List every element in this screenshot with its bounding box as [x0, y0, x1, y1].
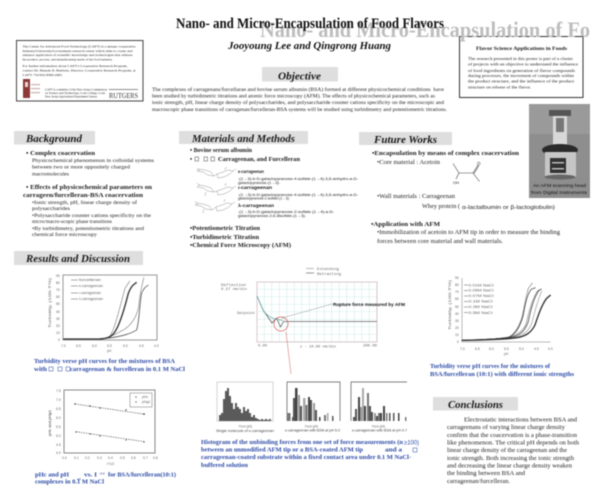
x axis labels: 6.0	[92, 344, 97, 348]
conclusions text: confirm that the coacervation is a phase-transition	[447, 432, 577, 439]
caption: ionic strength turbidity chart	[430, 363, 575, 378]
caption: carrageenan turbidity chart	[34, 358, 185, 373]
carrageenan formula labels	[238, 169, 359, 218]
carrageenan formula labels: galactopyranose-2-sulfate-(1→3)-	[238, 196, 291, 200]
conclusions text: like phenomenon. The critical pH depends on both	[447, 440, 579, 446]
background text: carrageen/furcelleran-BSA coacervation	[23, 192, 144, 199]
legend: λ-carrageenan	[79, 297, 103, 301]
x axis labels: 5.0	[519, 347, 524, 351]
encapsulation text: •Encapsulation by means of complex coacervation	[372, 151, 520, 157]
conclusions text: linear charge density of the carrageenan and the	[447, 447, 567, 454]
x axis labels: 0.8	[153, 456, 158, 460]
histogram subtitle: κ-carrageenan with BSA at pH 5.0	[285, 428, 340, 432]
legend: 0.07M NaCl	[468, 294, 494, 298]
x axis labels: 0.0	[62, 456, 67, 460]
background text: macromolecules	[32, 172, 69, 178]
panel: background	[14, 131, 154, 238]
caption: carrageenan turbidity chart: carrageenan & furcelleran in 0.1 M NaCl	[70, 366, 185, 373]
x axis labels: 6.5	[475, 347, 480, 351]
axis labels: 200.00	[363, 344, 377, 348]
x axis labels: 0.5	[120, 456, 125, 460]
icon: lambda-carrageenan structure	[195, 199, 235, 213]
Rutgers affiliation text: CAFT is a member of the New Jersey Commission	[45, 88, 107, 92]
y axis labels: 0	[457, 340, 459, 344]
x axis labels	[61, 344, 159, 353]
heading: future works: Future Works	[373, 134, 437, 146]
caption: ionic strength chart: complexes in 0.1 M NaCl	[35, 478, 104, 486]
objective paragraph: macroscopic phase transitions of carragenan/furcelleran-BSA systems will be studied using turbidimetry and potentiometric titrations.	[152, 106, 447, 113]
x axis labels	[460, 347, 553, 356]
legend	[71, 278, 103, 301]
axis labels: Force (pN)	[239, 424, 252, 428]
x axis labels: 7.0	[460, 347, 465, 351]
caption: carrageenan turbidity chart: with	[34, 366, 48, 373]
caption: carrageenan turbidity chart: Turbidity verse pH curves for the mixtures of BSA	[34, 358, 176, 365]
background text: • Complex coacervation	[26, 150, 96, 157]
line chart: turbidity vs pH at different ionic strengths	[448, 276, 553, 356]
background text: micro/macro-scopic phase transitions	[32, 219, 112, 225]
x axis labels: 4.5	[534, 347, 539, 351]
encapsulation text	[372, 151, 555, 211]
carrageenan formula labels: ι-carrageenan	[238, 185, 272, 191]
CAFT description text	[22, 44, 136, 77]
AFM image caption: from Digital Instruments	[531, 190, 588, 195]
histogram subtitle: κ-carrageenan with BSA at pH 4.7	[352, 428, 407, 432]
y axis labels: 5.5	[56, 425, 61, 429]
y axis labels: 90	[455, 276, 459, 280]
caption: ionic strength chart: for BSA/furcelleran(10:1)	[108, 472, 176, 478]
y axis labels: 10	[56, 331, 60, 335]
bar chart: histogram with BSA at pH 5.0	[285, 382, 340, 432]
caption: histograms	[201, 439, 419, 469]
chart legend	[306, 267, 341, 277]
panel: flavor science applications	[460, 36, 583, 98]
line chart: turbidity vs pH for carrageenans	[48, 274, 159, 353]
heading: future works	[359, 132, 452, 146]
caption: ionic strength turbidity chart: BSA/furcelleran (10:1) with different ionic strengths	[430, 371, 575, 378]
axis labels: Force (pN)	[305, 424, 318, 428]
flavor box text: of projects with an objective to understand the influence	[468, 62, 578, 66]
Rutgers affiliation text	[45, 88, 107, 98]
x axis labels: 0.6	[131, 456, 136, 460]
line chart: pHc and pHphi vs ionic strength	[48, 389, 158, 466]
flavor box text: structure on release of the flavor.	[468, 84, 531, 90]
caption: ionic strength chart: -1/2	[99, 472, 105, 476]
caption: histograms: buffered solution	[201, 462, 249, 469]
heading: conclusions	[433, 397, 518, 411]
x axis labels: 0.3	[97, 456, 102, 460]
flavor box text	[468, 56, 578, 90]
caption: ionic strength chart: vs. I	[84, 472, 98, 478]
panel: objective	[152, 67, 447, 113]
y axis labels: 50	[455, 305, 459, 309]
x axis labels: 6.5	[76, 344, 81, 348]
legend: 0.3M NaCl	[468, 305, 493, 309]
CAFT description text: Industry/University/Government research center which aims to create and	[22, 49, 133, 53]
AFM application text	[371, 222, 560, 245]
CAFT description text: For further information about CAFT's Cooperative Research Program,	[22, 64, 128, 69]
background text: between two or more oppositely charged	[32, 164, 130, 170]
legend: κ-carrageenan	[79, 284, 103, 288]
y axis labels: 80	[455, 283, 459, 287]
legend: pHφ1	[142, 400, 151, 404]
image: AFM scanning head	[529, 104, 590, 198]
background text: •Ionic strength, pH, linear charge density of	[32, 199, 137, 206]
heading: objective	[262, 67, 338, 82]
y axis labels: 80	[56, 281, 60, 285]
methods list: •Chemical Force Microscopy (AFM)	[190, 242, 291, 249]
conclusions text: the binding between BSA and	[447, 471, 525, 477]
icon: Rutgers logo: RUTGERS	[109, 92, 138, 100]
legend: furcelleran	[79, 278, 101, 282]
y axis labels: 7.5	[56, 389, 61, 393]
objective paragraph: ionic strength, pH, linear charge density of polysaccharides, and polysaccharide counter cations specificity on the microscopic and	[152, 99, 444, 106]
flavor box heading: Flavor Science Applications in Foods	[476, 47, 567, 52]
chart legend: Retracting	[317, 272, 341, 277]
x axis labels: 0.1	[74, 456, 79, 460]
background text: Physicochemical phenomenon in colloidal systems	[32, 158, 154, 164]
caption: histograms: carrageenan-coated substrate within a fixed contact area under 0.1 M NaCl-	[201, 454, 411, 461]
x axis labels: 6.0	[489, 347, 494, 351]
materials list	[190, 148, 301, 163]
encapsulation text: •Wall materials : Carrageenan	[377, 194, 455, 200]
icon: kappa-carrageenan structure	[197, 167, 236, 178]
caption: histograms: ≥100)	[404, 440, 419, 446]
conclusions text: and decreasing the linear charge density weaken	[447, 464, 572, 470]
AFM application text: •Application with AFM	[371, 222, 440, 228]
encapsulation text: •Core material : Acetoin	[377, 160, 440, 166]
panel: future works	[359, 132, 560, 245]
Rutgers affiliation text: New Jersey Agricultural Experiment Station	[45, 94, 97, 98]
y axis labels: Turbidity, (100-T%)	[48, 278, 52, 328]
encapsulation text: α-lactalbumin or β-lactoglobulin)	[462, 205, 555, 211]
carrageenan formula labels: galactopyranose-2,6-disulfate-(1→3)-	[238, 214, 307, 218]
CAFT description text: the product, process, and manufacturing needs of the food industry.	[22, 58, 113, 62]
x axis labels: 4.5	[139, 344, 144, 348]
methods list: •Potentiometric Titration	[190, 226, 261, 232]
icon: acetoin structure: O	[477, 161, 481, 166]
arrow to histograms	[286, 332, 291, 374]
conclusions text: Electrostatic interactions between BSA and	[464, 418, 577, 424]
y axis labels: 70	[455, 290, 459, 294]
y axis labels: 5.0	[56, 434, 61, 438]
panel: results and discussion heading	[14, 251, 143, 265]
axis labels: Setpoint	[237, 311, 255, 316]
plot grid	[257, 282, 377, 342]
y axis labels: 30	[455, 319, 459, 323]
x axis labels	[62, 456, 158, 466]
histogram bars	[288, 388, 334, 421]
conclusions text: ionic strength. Both increasing the ionic strength	[447, 456, 574, 462]
flavor box text: of food ingredients on generation of flavor compounds	[468, 68, 575, 73]
materials list: • Bovine serum albumin	[190, 148, 253, 154]
materials list: Carrageenan, and Furcelleran	[218, 157, 301, 163]
background text	[23, 150, 154, 238]
caption: histograms: between an unmodified AFM tip or a BSA-coated AFM tip	[201, 446, 364, 454]
x axis labels: 5.5	[504, 347, 509, 351]
encapsulation text: Whey protein (	[422, 203, 460, 210]
methods list	[190, 226, 291, 249]
materials list: •	[190, 157, 192, 163]
carrageenan formula labels: -(1→3)-b-D-galactopyranose-2-sulfate-(1→4)-a-D-	[238, 210, 335, 214]
title: Nano- and Micro-Encapsulation of Food Flavors	[176, 16, 444, 32]
CAFT description text: enhance application of scientific knowledge and technologies that address	[22, 53, 133, 57]
curves	[63, 277, 148, 339]
background text: •Polysaccharide counter cations specificity on the	[32, 212, 152, 219]
caption: ionic strength chart: pHc and pH	[35, 472, 69, 478]
y axis labels: 4.0	[56, 451, 61, 455]
curves	[462, 283, 551, 341]
axis labels	[221, 283, 377, 350]
y axis labels: 90	[56, 274, 60, 278]
panel: materials and methods	[179, 131, 359, 249]
y axis labels: 50	[56, 302, 60, 306]
y axis labels: Turbidity, (100-T%)	[448, 280, 452, 330]
carrageenan formula labels: λ-carrageenan	[238, 203, 274, 209]
panel: conclusions	[433, 397, 579, 485]
bar chart: histogram with BSA at pH 4.7	[351, 382, 407, 432]
legend	[464, 284, 494, 315]
caption: ionic strength turbidity chart: Turbidity verse pH curves for the mixtures of	[430, 363, 551, 370]
conclusions text: carrageenans of varying linear charge density	[447, 424, 565, 431]
x axis labels: 4.0	[154, 344, 159, 348]
y axis labels	[48, 389, 61, 455]
y axis labels: 60	[56, 295, 60, 299]
y axis labels: 4.5	[56, 443, 61, 447]
AFM image caption: An AFM scanning head	[533, 183, 586, 188]
force curves	[257, 296, 377, 327]
axis labels: 0.57 nm/div	[221, 287, 247, 292]
x axis labels: 5.5	[107, 344, 112, 348]
histogram bars	[353, 388, 406, 421]
objective paragraph: The complexes of carragenans/furcellaran and bovine serum albumin (BSA) formed at different physicochemical conditions have	[152, 86, 445, 93]
y axis labels: 70	[56, 288, 60, 292]
legend: 0.05M NaCl	[468, 288, 494, 292]
heading: materials and methods	[179, 131, 308, 145]
AFM application text: forces between core material and wall materials.	[377, 238, 504, 245]
heading: conclusions: Conclusions	[448, 399, 503, 411]
x axis labels: 5.0	[123, 344, 128, 348]
x axis labels: pH	[504, 352, 509, 356]
axis labels: Force (pN)	[372, 424, 385, 428]
x axis labels: 0.4	[108, 456, 113, 460]
objective paragraph	[152, 86, 447, 113]
y axis labels: 30	[56, 317, 60, 321]
caption: histograms: Histogram of the unbinding forces from one set of force measurements (n	[201, 439, 404, 446]
flavor box text: The research presented in this poster is part of a cluster	[468, 56, 573, 61]
y axis labels: 0	[58, 338, 60, 342]
x axis labels: 7.0	[61, 344, 66, 348]
y axis labels: 20	[56, 324, 60, 328]
y axis labels: 6.5	[56, 407, 61, 411]
heading: materials and methods: Materials and Methods	[191, 133, 295, 145]
y axis labels: 40	[56, 310, 60, 314]
heading: objective: Objective	[278, 70, 321, 82]
y axis labels: 7.0	[56, 398, 61, 402]
x axis labels: 4.0	[548, 347, 553, 351]
x axis labels: 0.7	[143, 456, 148, 460]
methods list: •Turbidimetric Titration	[190, 235, 260, 241]
conclusions text: carrageenan/furcelleran.	[447, 478, 511, 485]
icon: CAFT logo	[23, 79, 40, 98]
y axis labels	[448, 276, 459, 344]
authors: Jooyoung Lee and Qingrong Huang	[227, 41, 391, 52]
panel: results and discussion heading: Results and Discussion	[25, 253, 130, 265]
heading: background: Background	[25, 133, 82, 145]
carrageenan formula labels: -(1→3)-b-D-galactopyranose-4-sulfate-(1→4)-3,6-anhydro-a-D-	[238, 177, 359, 181]
carrageenan formula labels: galactopyranose-(1→3)-	[238, 181, 281, 185]
Rutgers affiliation text: on Science and Technology, Cook College, Cook	[45, 91, 105, 96]
x axis labels: pH	[107, 349, 112, 353]
background text: chemical force microscopy	[32, 231, 97, 238]
background text: • Effects of physicochemical parameters on	[26, 184, 153, 191]
carrageenan formula labels: κ-carrageenan	[238, 169, 264, 175]
axis labels: 0.00	[258, 344, 267, 348]
flavor box text: during processes, the movement of compounds within	[468, 73, 575, 79]
legend: 0.5M NaCl	[468, 311, 493, 315]
legend: 0.01M NaCl	[468, 284, 494, 288]
y axis labels: 6.0	[56, 416, 61, 420]
y axis labels: 10	[455, 333, 459, 337]
AFM application text: •Immobilization of acetoin to AFM tip in order to measure the binding	[377, 229, 560, 236]
legend: 0.1M NaCl	[468, 300, 493, 304]
axis labels: Deflection	[221, 283, 246, 288]
background text: polysaccharides	[32, 206, 70, 212]
icon: acetoin structure: OH	[453, 180, 459, 185]
y axis labels	[48, 274, 60, 342]
objective paragraph: been studied by turbidimetric titrations and atomic force microscopy (AFM). The effects of physicochemical parameters, such as	[152, 92, 435, 100]
rupture callout circle	[274, 317, 288, 331]
flavor box text: the product structure, and the influence of the product	[468, 78, 575, 84]
legend	[130, 393, 152, 407]
caption: ionic strength chart: φ1	[77, 477, 81, 481]
x axis labels: I^1/2	[107, 462, 114, 466]
caption: ionic strength chart	[35, 472, 176, 486]
y axis labels: 40	[455, 312, 459, 316]
dashed leader line	[282, 304, 332, 318]
data points	[74, 403, 145, 443]
y axis labels: pHc and pHφ1	[48, 410, 52, 436]
y axis labels: 60	[455, 297, 459, 301]
caption: histograms: and a	[385, 446, 402, 454]
y axis labels: 20	[455, 326, 459, 330]
conclusions text	[447, 418, 579, 485]
icon: acetoin structure	[453, 161, 481, 185]
histogram subtitle: Single molecule of κ-carrageenan	[216, 429, 274, 433]
bar chart: histogram of single molecule	[216, 382, 274, 433]
axis labels: z - 10.00 nm/div	[300, 344, 336, 350]
panel: CAFT information box	[16, 40, 143, 101]
AFM image caption	[531, 183, 588, 195]
chart legend: Extending	[317, 267, 339, 272]
legend: ι-carrageenan	[79, 291, 101, 295]
chart: AFM force curve	[221, 267, 405, 374]
legend: pHc	[142, 395, 148, 399]
CAFT description text: contact Dr. Henryk D. Baldwin, Director, Cooperative Research Program, at	[22, 68, 136, 74]
icon: iota-carrageenan structure	[197, 183, 236, 196]
background text: •By turbidimetry, potentiometric titrations and	[32, 226, 144, 232]
CAFT description text: The Center for Advanced Food Technology (CAFT) is a unique cooperative	[22, 44, 136, 48]
callout label: Rupture force measured by AFM	[333, 302, 405, 307]
data lines	[75, 404, 145, 442]
CAFT description text: CAFT: 732/932-8306 x683.	[22, 73, 63, 77]
carrageenan formula labels: -(1→3)-b-D-galactopyranose-4-sulfate-(1→4)-3,6-anhydro-a-D-	[238, 193, 359, 197]
x axis labels: 0.2	[85, 456, 90, 460]
